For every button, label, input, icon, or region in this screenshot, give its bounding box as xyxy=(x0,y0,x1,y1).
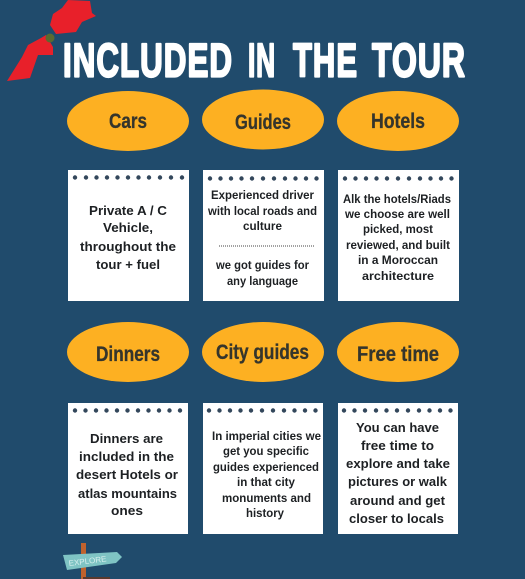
panel: Dinners: Dinners are xyxy=(90,431,163,446)
title: THE xyxy=(293,34,358,86)
panel: Dinners: ones xyxy=(111,503,143,518)
heading: Guides: Guides xyxy=(235,111,291,134)
heading: Free time xyxy=(337,322,459,382)
panel: Guides: we got guides for xyxy=(215,258,309,272)
title: INCLUDED xyxy=(63,34,233,86)
panel: Free time: free time to xyxy=(361,438,434,453)
panel: Guides: with local roads and xyxy=(207,204,317,218)
panel: City guides: guides experienced xyxy=(213,460,319,474)
panel: Hotels xyxy=(338,170,459,301)
panel: City guides: In imperial cities we xyxy=(212,429,321,443)
heading: Cars: Cars xyxy=(109,110,147,133)
panel: Cars: throughout the xyxy=(80,239,176,254)
icon: explore signpost: EXPLORE xyxy=(68,554,107,568)
panel: Cars xyxy=(68,170,189,301)
heading: Dinners xyxy=(67,322,189,382)
panel: Free time: You can have xyxy=(356,420,439,435)
panel: Cars: tour + fuel xyxy=(96,257,160,272)
panel: City guides: monuments and xyxy=(222,491,311,505)
panel: Free time: explore and take xyxy=(346,456,450,471)
heading: Free time: Free time xyxy=(357,343,439,366)
panel: Hotels: Alk the hotels/Riads xyxy=(343,192,451,206)
panel: Dinners: atlas mountains xyxy=(78,486,177,501)
panel: Guides: culture xyxy=(243,219,282,233)
panel: City guides: in that city xyxy=(237,475,295,489)
title: TOUR xyxy=(372,34,466,86)
heading: Dinners: Dinners xyxy=(96,343,160,366)
panel: Hotels: reviewed, and built xyxy=(346,238,450,252)
panel: Free time: around and get xyxy=(350,493,446,508)
title xyxy=(63,34,466,86)
panel: Guides: any language xyxy=(227,274,298,288)
panel: Hotels: picked, most xyxy=(363,222,433,236)
heading: Guides xyxy=(202,90,324,150)
panel: City guides: get you specific xyxy=(223,444,309,458)
panel: Cars: Vehicle, xyxy=(103,220,153,235)
panel: Guides xyxy=(203,170,324,301)
panel: City guides: history xyxy=(246,506,284,520)
panel: Free time: closer to locals xyxy=(349,511,444,526)
panel: Hotels: architecture xyxy=(362,269,434,283)
panel: Dinners: desert Hotels or xyxy=(76,467,178,482)
heading: Hotels: Hotels xyxy=(371,110,425,133)
panel: Hotels: we choose are well xyxy=(344,207,450,221)
panel: Guides: Experienced driver xyxy=(211,188,314,202)
panel: Free time: pictures or walk xyxy=(348,474,448,489)
heading: Cars xyxy=(67,91,189,151)
heading: City guides: City guides xyxy=(216,341,309,364)
panel: Cars: Private A / C xyxy=(89,203,168,218)
title: IN xyxy=(248,34,276,86)
icon: Morocco map xyxy=(7,0,96,81)
panel: Dinners xyxy=(68,403,188,534)
panel: Hotels: in a Moroccan xyxy=(358,253,438,267)
icon: explore signpost xyxy=(63,543,122,579)
panel: City guides xyxy=(203,403,323,534)
heading: Hotels xyxy=(337,91,459,151)
panel: Dinners: included in the xyxy=(79,449,174,464)
panel: Free time xyxy=(338,403,458,534)
heading: City guides xyxy=(202,322,324,382)
